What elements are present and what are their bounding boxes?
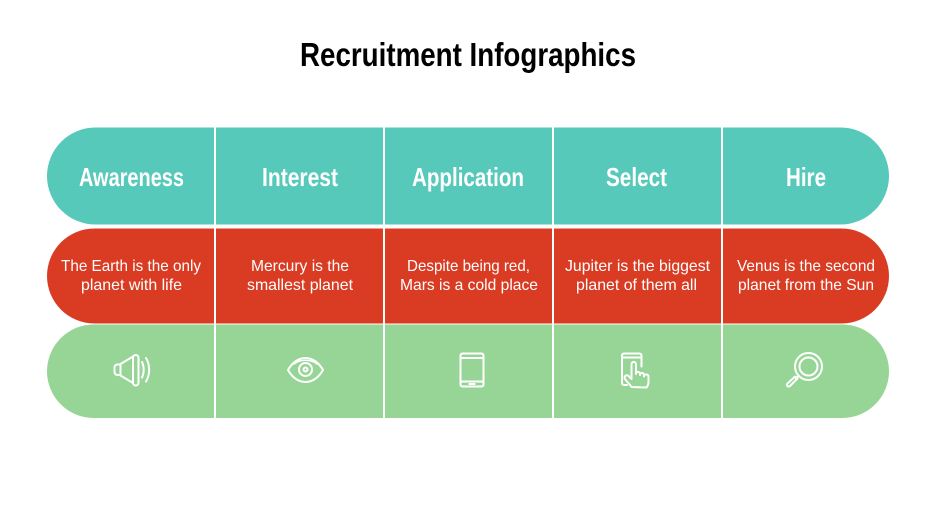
text: Awareness description: The Earth is the only [61, 258, 201, 275]
text: Interest description: smallest planet [247, 277, 354, 294]
panel: stage header row [47, 128, 889, 224]
panel: description row [47, 228, 889, 324]
text: Hire description: planet from the Sun [738, 277, 874, 294]
heading: Application: Application [412, 162, 524, 192]
text: Select description: Jupiter is the biggest [565, 258, 711, 275]
text: Hire description [737, 258, 875, 294]
column dividers [214, 127, 723, 419]
icon: speaker [114, 355, 149, 386]
icon: tablet with tapping hand [622, 354, 648, 388]
text: Interest description: Mercury is the [251, 258, 349, 275]
heading: Interest: Interest [262, 162, 338, 192]
heading: Hire: Hire [786, 162, 826, 192]
text: Application description: Mars is a cold place [400, 277, 538, 294]
text: Application description: Despite being red, [407, 258, 530, 275]
text: Application description [400, 258, 538, 294]
panel: icon row [47, 324, 889, 418]
icon: eye [288, 358, 323, 382]
heading: Awareness: Awareness [79, 162, 184, 192]
text: Interest description [247, 258, 354, 294]
heading: Select: Select [606, 162, 667, 192]
text: Awareness description: planet with life [81, 277, 182, 294]
icon: tablet [460, 354, 484, 386]
text: Select description [565, 258, 711, 294]
icon: magnifying glass [787, 353, 822, 387]
text: Hire description: Venus is the second [737, 258, 875, 275]
title: Recruitment Infographics [300, 36, 636, 73]
text: Select description: planet of them all [576, 277, 697, 294]
text: Awareness description [61, 258, 201, 294]
